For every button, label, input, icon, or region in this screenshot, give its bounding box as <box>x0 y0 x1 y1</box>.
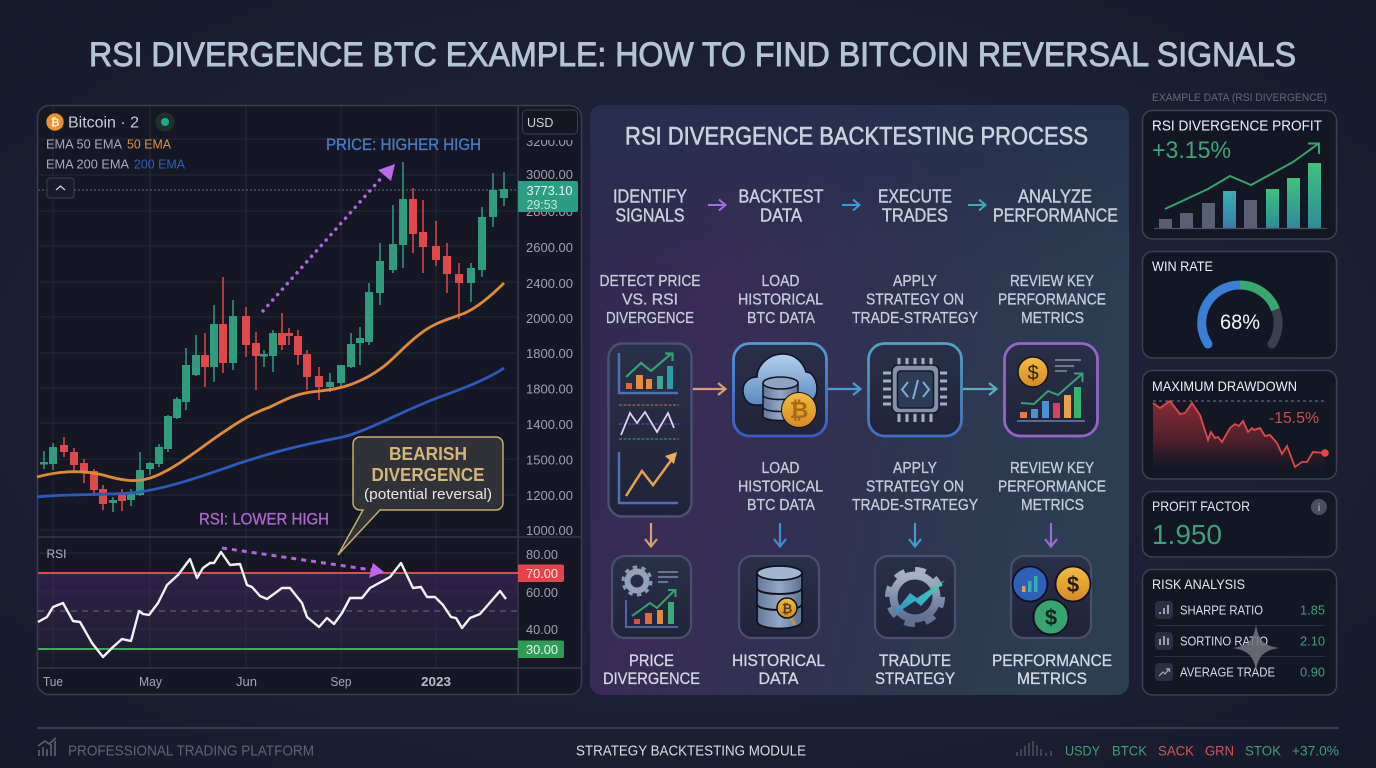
ema 200 line <box>37 368 504 497</box>
ema legend: 50 EMA <box>127 138 172 152</box>
panel: profit factor <box>1142 492 1336 557</box>
arrow: down orange <box>645 523 657 546</box>
price axis labels: 2000.00 <box>526 311 573 326</box>
ticker symbols: USDY <box>1065 742 1101 758</box>
rsi 30 tag: 30.00 <box>526 642 558 657</box>
example data caption: EXAMPLE DATA (RSI DIVERGENCE) <box>1152 92 1327 104</box>
panel: win rate <box>1142 252 1336 358</box>
lower descriptions: BTC DATA <box>747 497 816 514</box>
profit bars <box>1154 163 1327 228</box>
process heading: RSI DIVERGENCE BACKTESTING PROCESS <box>625 122 1088 150</box>
lower descriptions: REVIEW KEY <box>1010 460 1094 477</box>
chart header: bitcoin label: Bitcoin · 2 <box>68 114 139 132</box>
current price tag: 29:53 <box>526 197 558 212</box>
price axis labels: 1000.00 <box>526 523 573 538</box>
rsi lower high label: RSI: LOWER HIGH <box>199 510 329 528</box>
icon: database with coin: ₿ <box>782 601 792 616</box>
price axis labels: 1500.00 <box>526 452 573 468</box>
icon: three coins: $ <box>1045 605 1057 630</box>
drawdown area <box>1153 401 1325 471</box>
average trade row: AVERAGE TRADE <box>1180 666 1275 680</box>
upper descriptions: DIVERGENCE <box>606 310 694 327</box>
ticker symbols: GRN <box>1205 742 1234 758</box>
icon: code chip <box>868 344 962 436</box>
title: RSI DIVERGENCE BTC EXAMPLE: HOW TO FIND BITCOIN REVERSAL SIGNALS <box>89 36 1296 74</box>
upper descriptions <box>600 273 1106 327</box>
panel: maximum drawdown <box>1142 370 1336 479</box>
bottom labels: DATA <box>758 669 799 688</box>
step labels row: IDENTIFY <box>613 186 687 206</box>
usd selector: USD <box>527 116 553 130</box>
lower descriptions: APPLY <box>893 460 937 477</box>
lower descriptions: LOAD <box>762 460 800 477</box>
rsi 70 tag <box>518 564 564 582</box>
current price tag: 3773.10 <box>526 183 572 198</box>
bottom labels: TRADUTE <box>879 651 951 670</box>
ticker symbols: STOK <box>1245 742 1282 758</box>
panel: profit factor: i <box>1318 502 1320 514</box>
upper descriptions: HISTORICAL <box>738 292 823 308</box>
arrow: backtest to execute <box>842 200 860 210</box>
panel: win rate: 68% <box>1220 311 1260 334</box>
icon: three coins <box>1011 556 1091 638</box>
upper descriptions: TRADE-STRATEGY <box>852 310 978 327</box>
panel: win rate: WIN RATE <box>1152 259 1213 274</box>
step labels row: EXECUTE <box>878 186 952 206</box>
ema legend: EMA 200 EMA <box>46 158 130 172</box>
ticker symbols: BTCK <box>1112 742 1148 758</box>
lower descriptions: HISTORICAL <box>738 478 823 496</box>
panel: profit factor: 1.950 <box>1152 519 1222 550</box>
rsi 70 tag: 70.00 <box>526 566 558 581</box>
icon: price and rsi charts card <box>608 344 692 516</box>
rsi 30 tag <box>518 640 564 658</box>
rsi zone <box>38 573 518 667</box>
chart header: bitcoin label <box>46 112 174 132</box>
step labels row: BACKTEST <box>738 186 824 206</box>
profit trend line <box>1165 144 1319 209</box>
footer <box>38 738 1339 760</box>
bottom labels: METRICS <box>1017 669 1087 688</box>
sortino ratio row <box>1155 632 1325 650</box>
time axis labels: Sep <box>330 675 352 689</box>
average trade row <box>1155 663 1325 681</box>
panel: backtesting process <box>590 105 1129 695</box>
lower descriptions: PERFORMANCE <box>998 478 1106 496</box>
time axis labels: Tue <box>43 675 63 689</box>
rsi axis labels: 80.00 <box>526 547 558 562</box>
sharpe ratio row: SHARPE RATIO <box>1180 604 1263 618</box>
time axis labels: May <box>139 675 163 689</box>
arrow: down teal <box>909 523 921 546</box>
lower descriptions <box>738 460 1106 514</box>
module label: STRATEGY BACKTESTING MODULE <box>576 744 806 760</box>
panel: maximum drawdown: -15.5% <box>1269 410 1319 427</box>
candlesticks <box>44 162 504 512</box>
lower descriptions: METRICS <box>1021 497 1084 514</box>
price axis labels: 2800.00 <box>526 204 573 219</box>
bottom labels: HISTORICAL <box>732 651 825 670</box>
ema legend: 200 EMA <box>134 158 186 172</box>
icon: footer chart <box>38 738 56 756</box>
step labels row: TRADES <box>882 206 948 226</box>
icon: performance metrics dashboard: $ <box>1027 362 1039 384</box>
step labels row: ANALYZE <box>1018 186 1092 206</box>
panel: profit factor: PROFIT FACTOR <box>1152 498 1250 514</box>
bottom labels: PERFORMANCE <box>992 651 1112 670</box>
icon: database with coin <box>739 556 819 638</box>
panel: risk analysis <box>1142 570 1336 695</box>
sortino ratio row: 2.10 <box>1300 634 1325 648</box>
price higher high label: PRICE: HIGHER HIGH <box>326 136 481 154</box>
upper descriptions: DETECT PRICE <box>600 273 700 290</box>
icon: three coins: $ <box>1067 572 1079 597</box>
current price tag <box>518 181 578 212</box>
sparkle <box>1232 624 1280 672</box>
icon: gear with lightning <box>875 556 955 638</box>
upper descriptions: REVIEW KEY <box>1010 273 1094 290</box>
upper descriptions: LOAD <box>762 273 800 290</box>
icon: performance metrics dashboard <box>1004 344 1098 436</box>
time axis labels <box>43 675 451 689</box>
icon: cloud database with bitcoin <box>734 344 826 436</box>
step labels row: DATA <box>760 206 802 226</box>
panel: rsi divergence profit <box>1142 110 1336 239</box>
arrow: charts to cloud <box>693 383 726 395</box>
rsi axis labels: 60.00 <box>526 585 558 600</box>
panel: rsi divergence profit: +3.15% <box>1152 137 1231 164</box>
drawdown line <box>1153 401 1325 467</box>
upper descriptions: PERFORMANCE <box>998 292 1106 308</box>
price axis labels: 1200.00 <box>526 488 573 503</box>
ema legend <box>46 138 186 172</box>
ema 50 line <box>37 283 504 481</box>
sortino ratio row: SORTINO RATIO <box>1180 634 1268 648</box>
rsi axis labels: 40.00 <box>526 622 558 637</box>
time axis labels: 2023 <box>421 675 451 689</box>
upper descriptions: STRATEGY ON <box>866 292 964 308</box>
ticker symbols: SACK <box>1158 742 1195 758</box>
platform label: PROFESSIONAL TRADING PLATFORM <box>68 744 314 760</box>
price divergence arrow <box>263 164 395 311</box>
step labels row <box>613 186 1118 226</box>
price axis labels: 3200.00 <box>526 134 573 149</box>
arrow: down purple <box>1045 523 1057 546</box>
collapse button <box>47 178 74 198</box>
rsi line <box>38 552 506 657</box>
price axis labels: 2600.00 <box>526 240 573 255</box>
arrow: cloud to chip <box>828 383 860 395</box>
rsi label: RSI <box>46 547 67 561</box>
ticker bars <box>1017 741 1051 756</box>
rsi axis labels <box>526 547 558 637</box>
panel: rsi divergence profit: RSI DIVERGENCE PROFIT <box>1152 118 1322 134</box>
price axis labels: 3000.00 <box>526 167 573 182</box>
rsi divergence arrow <box>222 548 384 578</box>
price axis labels: 2400.00 <box>526 276 573 291</box>
average trade row: 0.90 <box>1300 664 1325 680</box>
step labels row: SIGNALS <box>616 206 684 226</box>
bottom labels: PRICE <box>629 651 674 670</box>
usd selector <box>520 110 578 140</box>
ema legend: EMA 50 EMA <box>46 138 123 152</box>
upper descriptions: APPLY <box>893 273 937 290</box>
ticker symbols <box>1065 742 1339 758</box>
chart header: bitcoin label: ₿ <box>51 117 60 129</box>
icon: cloud database with bitcoin: ₿ <box>790 397 808 423</box>
ticker symbols: +37.0% <box>1292 742 1339 758</box>
lower descriptions: STRATEGY ON <box>866 478 964 496</box>
upper descriptions: BTC DATA <box>747 310 816 327</box>
arrow: chip to metrics <box>963 383 996 395</box>
callout: bearish divergence <box>338 437 503 555</box>
callout: bearish divergence: (potential reversal) <box>364 487 492 503</box>
time axis labels: Jun <box>236 675 257 689</box>
arrow: down blue <box>774 523 786 546</box>
bottom labels: DIVERGENCE <box>603 669 700 688</box>
lower descriptions: TRADE-STRATEGY <box>852 497 978 514</box>
bottom labels <box>603 651 1112 688</box>
bottom labels: STRATEGY <box>875 669 955 688</box>
gauge <box>1202 285 1278 344</box>
upper descriptions: VS. RSI <box>622 292 678 308</box>
sharpe ratio row <box>1155 601 1325 619</box>
price axis labels: 1400.00 <box>526 417 573 432</box>
upper descriptions: METRICS <box>1021 310 1084 327</box>
icon: gear and chart <box>612 556 691 638</box>
rsi guide lines <box>38 572 518 574</box>
callout: bearish divergence: BEARISH <box>389 444 467 464</box>
panel: maximum drawdown: MAXIMUM DRAWDOWN <box>1152 378 1297 394</box>
arrow: signals to backtest <box>708 200 726 210</box>
callout: bearish divergence: DIVERGENCE <box>372 465 484 485</box>
arrow: execute to analyze <box>968 200 986 210</box>
panel: bitcoin price chart <box>37 106 582 694</box>
step labels row: PERFORMANCE <box>993 206 1118 226</box>
price axis labels: 1800.00 <box>526 382 573 396</box>
panel: risk analysis: RISK ANALYSIS <box>1152 576 1245 592</box>
price axis labels: 1800.00 <box>526 346 573 361</box>
price axis labels <box>526 134 573 538</box>
sharpe ratio row: 1.85 <box>1300 602 1325 618</box>
